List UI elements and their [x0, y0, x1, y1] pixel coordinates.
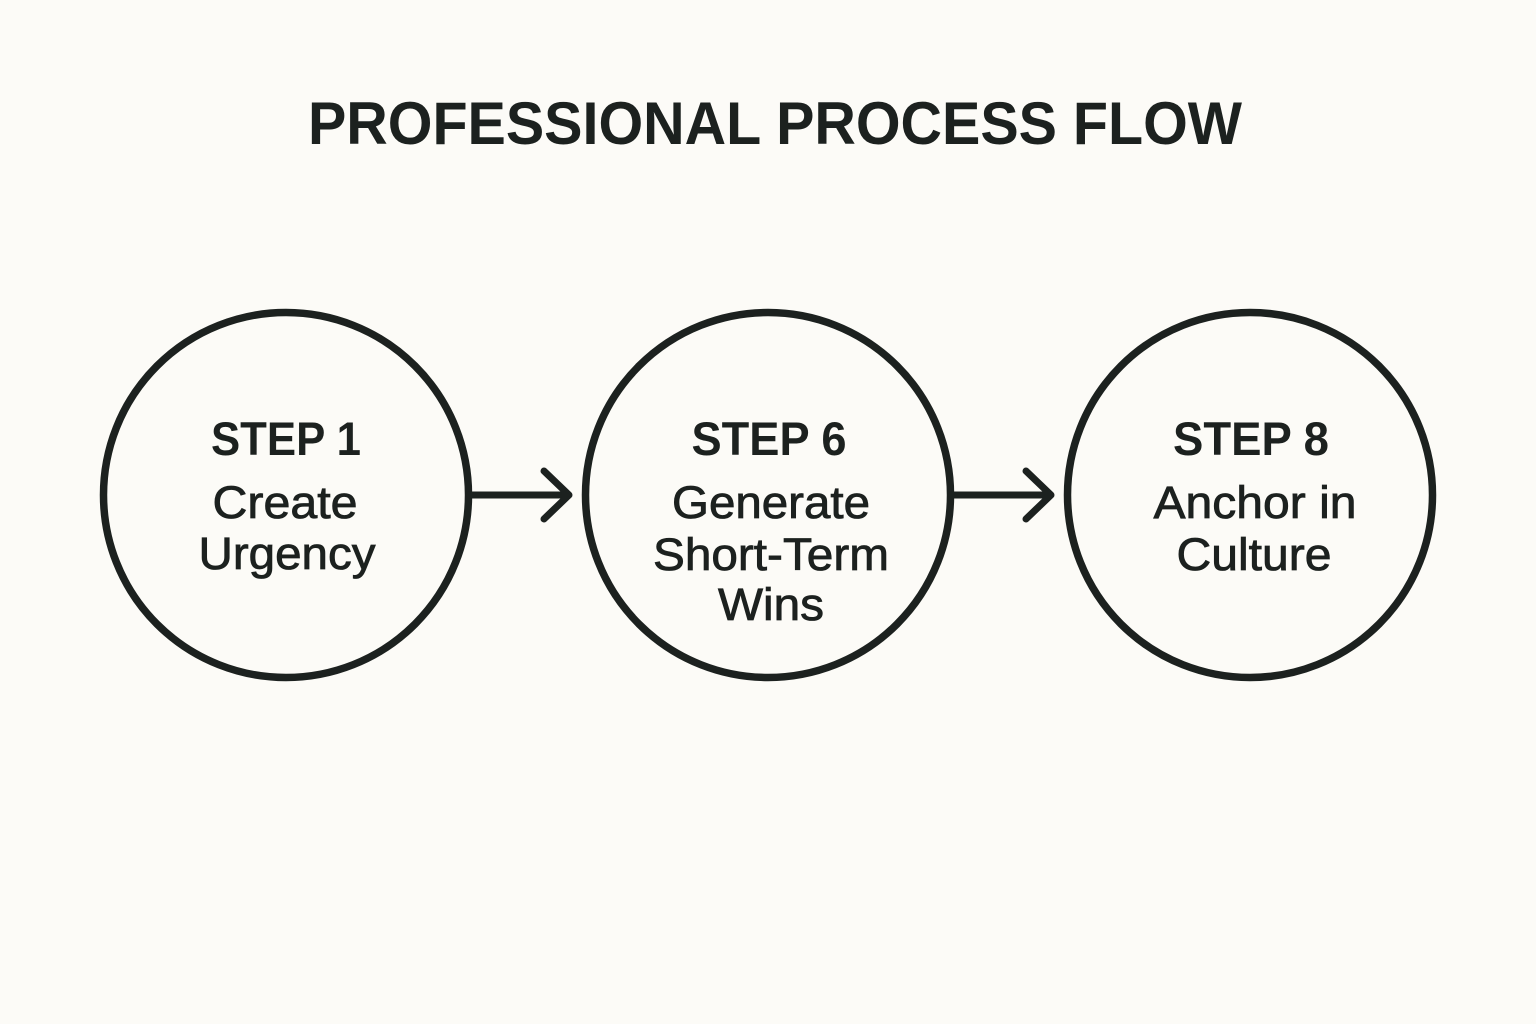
step 1 node: Create: [212, 477, 358, 528]
step 8 node: STEP 8: [1173, 412, 1329, 465]
arrow: step 6 to step 8: [952, 471, 1051, 519]
step 6 node: Short-Term: [653, 529, 889, 580]
step 8 node: Anchor in: [1154, 477, 1356, 528]
step 6 node: Generate: [672, 477, 870, 528]
title: PROFESSIONAL PROCESS FLOW: [308, 90, 1242, 157]
step 1 node: STEP 1: [211, 412, 361, 465]
step 1 node: [104, 312, 468, 678]
step 6 node: Wins: [718, 579, 824, 630]
step 6 node: [586, 312, 950, 678]
step 1 node: Urgency: [198, 528, 376, 579]
arrow: step 1 to step 6: [470, 471, 569, 519]
step 8 node: Culture: [1176, 529, 1332, 580]
step 8 node: [1068, 312, 1432, 678]
step 6 node: STEP 6: [692, 412, 846, 465]
